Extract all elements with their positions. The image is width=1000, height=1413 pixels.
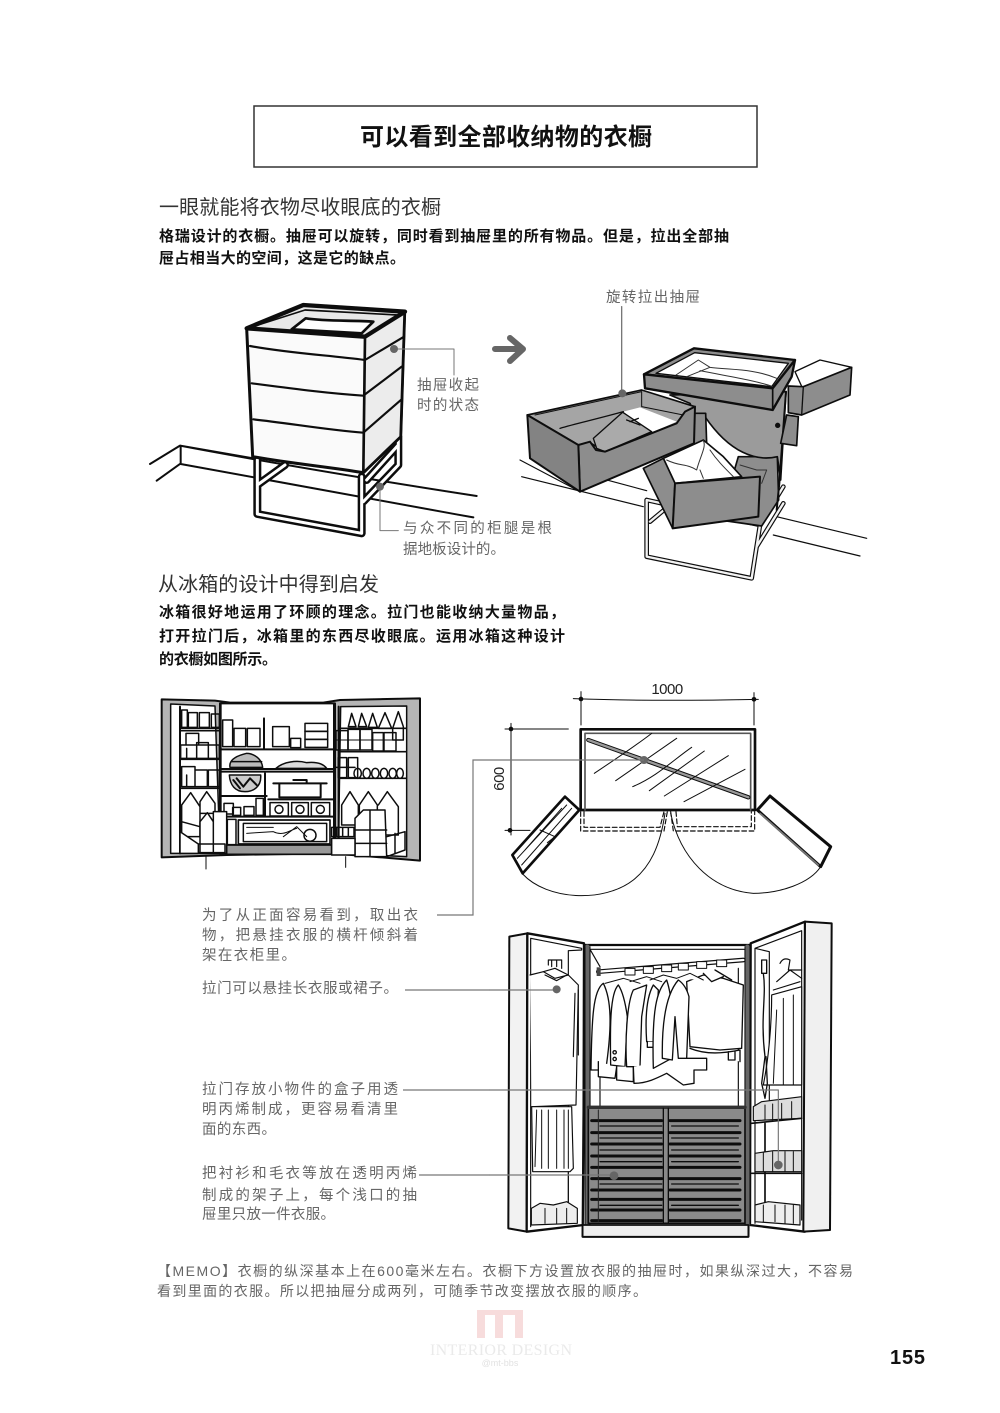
leader: tilted rail bbox=[437, 760, 644, 915]
wardrobe right door bbox=[750, 922, 832, 1232]
text block: section two body bbox=[159, 603, 565, 668]
page number: 155 bbox=[890, 1347, 925, 1369]
illustration: open refrigerator bbox=[162, 698, 420, 869]
watermark: @mt-bbs bbox=[482, 1358, 519, 1368]
lower drawer bbox=[643, 440, 767, 528]
wardrobe center cabinet bbox=[583, 945, 750, 1237]
left door bbox=[512, 797, 579, 873]
label: door hanging: 拉门可以悬挂长衣服或裙子。 bbox=[202, 980, 398, 997]
label: acrylic shelves: 制成的架子上，每个浅口的抽 bbox=[202, 1187, 417, 1204]
watermark: INTERIOR DESIGN bbox=[430, 1342, 572, 1359]
label: tilted rail: 为了从正面容易看到，取出衣 bbox=[202, 907, 418, 924]
illustration: open wardrobe bbox=[490, 922, 832, 1237]
callout dot and leader: rotate out bbox=[620, 307, 624, 393]
text block: section one body bbox=[159, 227, 729, 267]
illustration: open rotating drawer cabinet bbox=[520, 307, 867, 578]
label: unique legs bbox=[403, 520, 552, 558]
hanging clothes bbox=[591, 970, 743, 1085]
door swing arcs bbox=[523, 813, 821, 896]
refrigerator left door shelves bbox=[181, 728, 219, 788]
heading: section two: 从冰箱的设计中得到启发 bbox=[158, 573, 379, 596]
leaders from labels to wardrobe bbox=[403, 990, 490, 1175]
callout dot bbox=[640, 756, 648, 764]
label: acrylic shelves: 屉里只放一件衣服。 bbox=[202, 1206, 335, 1223]
top drawer bbox=[644, 348, 795, 410]
dimension label 1000: 1000 bbox=[651, 681, 683, 698]
refrigerator feet bbox=[206, 857, 346, 869]
text block: section two body: 打开拉门后，冰箱里的东西尽收眼底。运用冰箱这种设计 bbox=[159, 627, 565, 645]
label: drawers closed state bbox=[417, 377, 480, 414]
left drawer bbox=[527, 390, 695, 492]
text block: section two body: 的衣橱如图所示。 bbox=[159, 650, 277, 668]
callout dot and leader: drawers closed bbox=[394, 349, 454, 375]
label: tilted rail: 架在衣柜里。 bbox=[202, 947, 296, 964]
plan cabinet body bbox=[581, 729, 755, 810]
label: acrylic boxes bbox=[202, 1081, 398, 1138]
memo text bbox=[157, 1263, 853, 1299]
hanging rail bbox=[597, 960, 743, 976]
watermark bbox=[430, 1310, 572, 1368]
memo text: 【MEMO】衣橱的纵深基本上在600毫米左右。衣橱下方设置放衣服的抽屉时，如果纵深过大，不容易 bbox=[157, 1263, 853, 1279]
right door bbox=[757, 796, 831, 867]
dimension: 1000 width bbox=[573, 692, 758, 725]
illustration: wardrobe plan with dimensions bbox=[505, 692, 831, 896]
label: unique legs: 与众不同的柜腿是根 bbox=[403, 520, 552, 537]
illustration: closed rotating drawer cabinet bbox=[150, 305, 477, 533]
refrigerator right door shelves bbox=[340, 728, 406, 778]
dashed door positions bbox=[581, 812, 755, 831]
label: unique legs: 据地板设计的。 bbox=[403, 540, 505, 558]
callout dot and leader: legs bbox=[380, 487, 398, 531]
text block: section one body: 屉占相当大的空间，这是它的缺点。 bbox=[159, 249, 405, 267]
label: acrylic shelves bbox=[202, 1164, 417, 1223]
label: drawers closed state: 抽屉收起 bbox=[417, 377, 480, 394]
label: drawers closed state: 时的状态 bbox=[417, 397, 479, 414]
refrigerator center shelves bbox=[220, 718, 333, 817]
label: rotate drawers out: 旋转拉出抽屉 bbox=[606, 289, 700, 306]
drawer stack bbox=[588, 1107, 745, 1223]
callout leaders and dots bbox=[490, 985, 783, 1180]
dimension: 600 depth bbox=[505, 723, 568, 835]
wardrobe left door bbox=[508, 933, 584, 1232]
text block: section one body: 格瑞设计的衣橱。抽屉可以旋转，同时看到抽屉里的所有物品。但是，拉出全部抽 bbox=[159, 227, 729, 245]
label: acrylic boxes: 拉门存放小物件的盒子用透 bbox=[202, 1081, 398, 1098]
memo text: 看到里面的衣服。所以把抽屉分成两列，可随季节改变摆放衣服的顺序。 bbox=[157, 1283, 647, 1299]
dimension label 600: 600 bbox=[491, 767, 508, 791]
label: tilted rail: 物，把悬挂衣服的横杆倾斜着 bbox=[202, 927, 418, 944]
label: acrylic shelves: 把衬衫和毛衣等放在透明丙烯 bbox=[202, 1164, 417, 1182]
side drawer bbox=[788, 360, 852, 415]
label: acrylic boxes: 面的东西。 bbox=[202, 1121, 276, 1138]
label: tilted rail bbox=[202, 907, 418, 964]
text block: section two body: 冰箱很好地运用了环顾的理念。拉门也能收纳大量物品， bbox=[159, 603, 565, 621]
title box bbox=[254, 106, 757, 167]
title box: 可以看到全部收纳物的衣橱 bbox=[360, 124, 652, 151]
arrow bbox=[495, 338, 523, 361]
label: acrylic boxes: 明丙烯制成，更容易看清里 bbox=[202, 1101, 398, 1118]
heading: section one: 一眼就能将衣物尽收眼底的衣橱 bbox=[159, 196, 441, 219]
